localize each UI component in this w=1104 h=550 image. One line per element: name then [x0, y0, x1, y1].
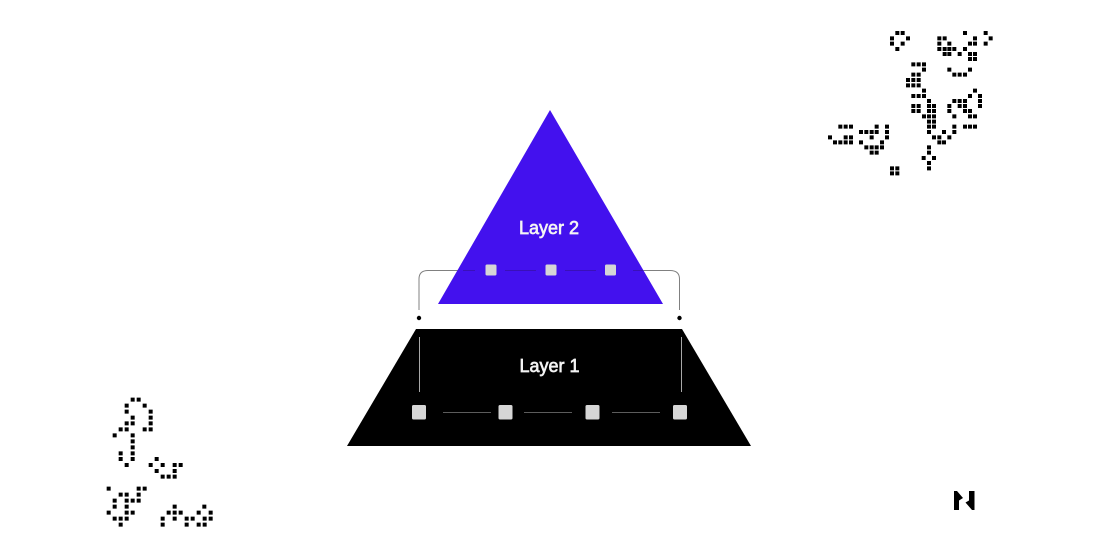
- bracket connecting the layers: [417, 270, 682, 320]
- icon: N logo: [954, 491, 974, 510]
- layer 1 label: Layer 1: [519, 356, 580, 376]
- layer 1 nodes: [412, 405, 687, 420]
- pixel pattern: bottom left: [109, 400, 211, 525]
- layer 2 nodes: [486, 264, 616, 276]
- layer 2 label: Layer 2: [519, 218, 579, 238]
- layer 1 trapezoid: [347, 329, 751, 446]
- layer 1 connector lines: [420, 337, 682, 412]
- pixel pattern: top right: [830, 33, 991, 173]
- layer 2 triangle: [438, 110, 663, 304]
- layer 2 connector lines: [463, 270, 643, 272]
